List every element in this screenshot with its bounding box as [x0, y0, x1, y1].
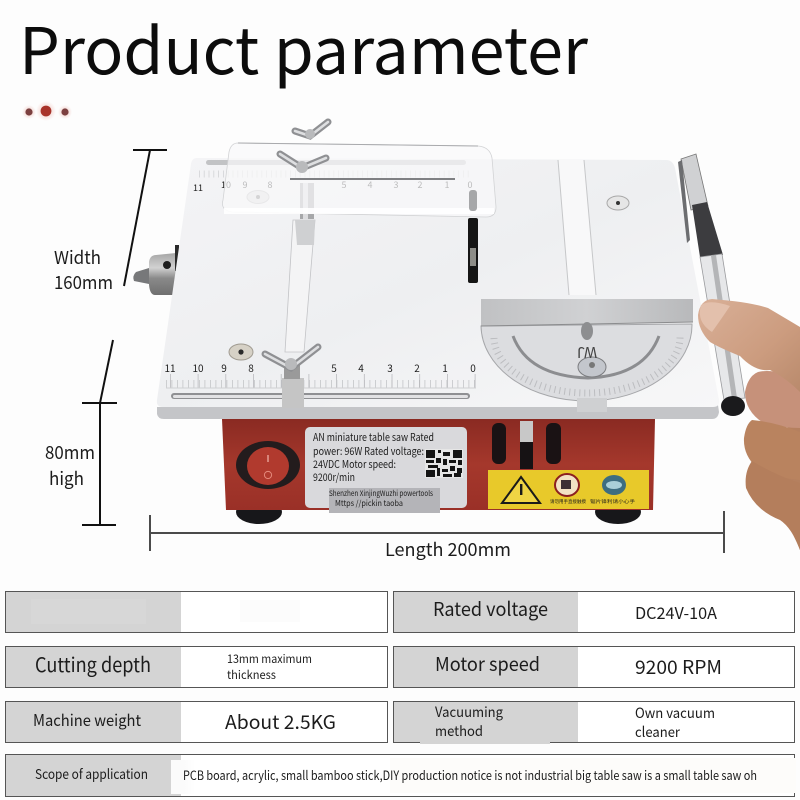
front ruler: 9 — [221, 360, 227, 375]
spec sticker: 9200r/min — [313, 470, 355, 485]
angle protractor: WJ — [577, 342, 597, 363]
front ruler — [164, 360, 476, 388]
QR code — [425, 449, 463, 478]
spec row: machine weight: About 2.5KG — [225, 708, 336, 735]
front ruler: 4 — [358, 360, 364, 375]
decorative three-dot icon — [22, 101, 72, 121]
rubber feet — [236, 500, 641, 524]
spec sticker: 24VDC Motor speed: — [313, 457, 396, 472]
saw blade slot — [468, 218, 478, 283]
spec row: vacuuming method: method — [435, 721, 483, 741]
rear ruler: 5 — [342, 178, 346, 191]
height label: 80mm — [45, 439, 95, 465]
angle protractor — [481, 299, 693, 412]
spec row: vacuuming method: cleaner — [635, 722, 681, 742]
rear ruler: 3 — [394, 178, 398, 191]
spec row: scope of application — [6, 754, 796, 796]
red saw body — [222, 419, 655, 510]
width label: Width — [54, 244, 101, 270]
rear ruler: 10 — [221, 178, 231, 191]
rear slot — [206, 160, 466, 165]
spec row: motor speed: 9200 RPM — [635, 653, 722, 680]
front ruler: 1 — [442, 360, 448, 375]
front ruler: 0 — [470, 360, 476, 375]
aluminium table plate — [157, 122, 719, 419]
spec row: vacuuming method: Vacuuming — [435, 702, 503, 722]
spec row: scope of application: Scope of application — [35, 763, 148, 783]
rear ruler: 1 — [444, 178, 450, 191]
width label — [54, 244, 113, 295]
spec sticker: Mttps //pickin taoba — [335, 498, 403, 509]
rear ruler: 8 — [268, 178, 272, 191]
spec row: rated voltage: DC24V-10A — [635, 600, 717, 624]
spec sticker: Shenzhen XinjingWuzhi powertools — [329, 488, 433, 499]
spec row: blanked parameter — [6, 592, 388, 632]
front ruler: 10 — [192, 360, 204, 375]
spec row: vacuuming method — [394, 702, 794, 744]
spec row: cutting depth: Cutting depth — [35, 649, 151, 678]
spec row: cutting depth: thickness — [227, 667, 276, 683]
mounting screws — [229, 190, 629, 360]
rip fence bar — [282, 183, 315, 408]
spec row: rated voltage — [394, 592, 794, 632]
spec row: machine weight — [6, 702, 388, 742]
rear ruler — [193, 174, 472, 194]
width label: 160mm — [54, 269, 113, 295]
yellow warning label: 锯片锋利请小心手 — [590, 498, 635, 505]
front ruler: 2 — [414, 360, 420, 375]
clear acrylic guide — [222, 143, 496, 217]
spec row: cutting depth — [6, 646, 388, 688]
spec sticker: AN miniature table saw Rated — [313, 430, 434, 445]
spec row: vacuuming method: Own vacuum — [635, 703, 715, 723]
height dimension line — [82, 403, 117, 525]
centre rail — [558, 160, 596, 295]
rear ruler: 9 — [242, 178, 248, 191]
hand holding the pen — [698, 299, 800, 550]
spec row: machine weight: Machine weight — [33, 707, 141, 731]
product photo: mini table saw — [133, 122, 800, 550]
front ruler: 11 — [164, 360, 176, 375]
front ruler: 8 — [248, 360, 254, 375]
height label — [45, 439, 95, 491]
spec sticker — [305, 427, 467, 513]
length label: Length 200mm — [385, 536, 511, 562]
wing nuts — [265, 122, 328, 370]
front ruler: 5 — [331, 360, 337, 375]
length dimension line — [150, 511, 725, 553]
spec row: motor speed: Motor speed — [435, 650, 540, 677]
yellow warning label — [488, 470, 649, 509]
rocker power switch — [236, 441, 300, 489]
drill chuck — [133, 245, 179, 295]
spec sticker: power: 96W Rated voltage: — [313, 444, 424, 459]
width dimension line — [100, 150, 167, 403]
ball pen — [678, 154, 745, 416]
spec row: motor speed — [394, 646, 794, 688]
rear ruler: 0 — [468, 178, 472, 191]
spec row: cutting depth: 13mm maximum — [227, 651, 312, 667]
spec row: rated voltage: Rated voltage — [433, 595, 548, 622]
title: Product parameter — [19, 1, 588, 93]
rear ruler: 2 — [418, 178, 422, 191]
yellow warning label: 请勿用手直接触摸 — [550, 498, 586, 505]
rear ruler: 4 — [368, 178, 372, 191]
rear ruler: 11 — [193, 181, 203, 194]
height label: high — [49, 465, 84, 491]
front slot — [171, 393, 470, 399]
front ruler: 3 — [387, 360, 393, 375]
